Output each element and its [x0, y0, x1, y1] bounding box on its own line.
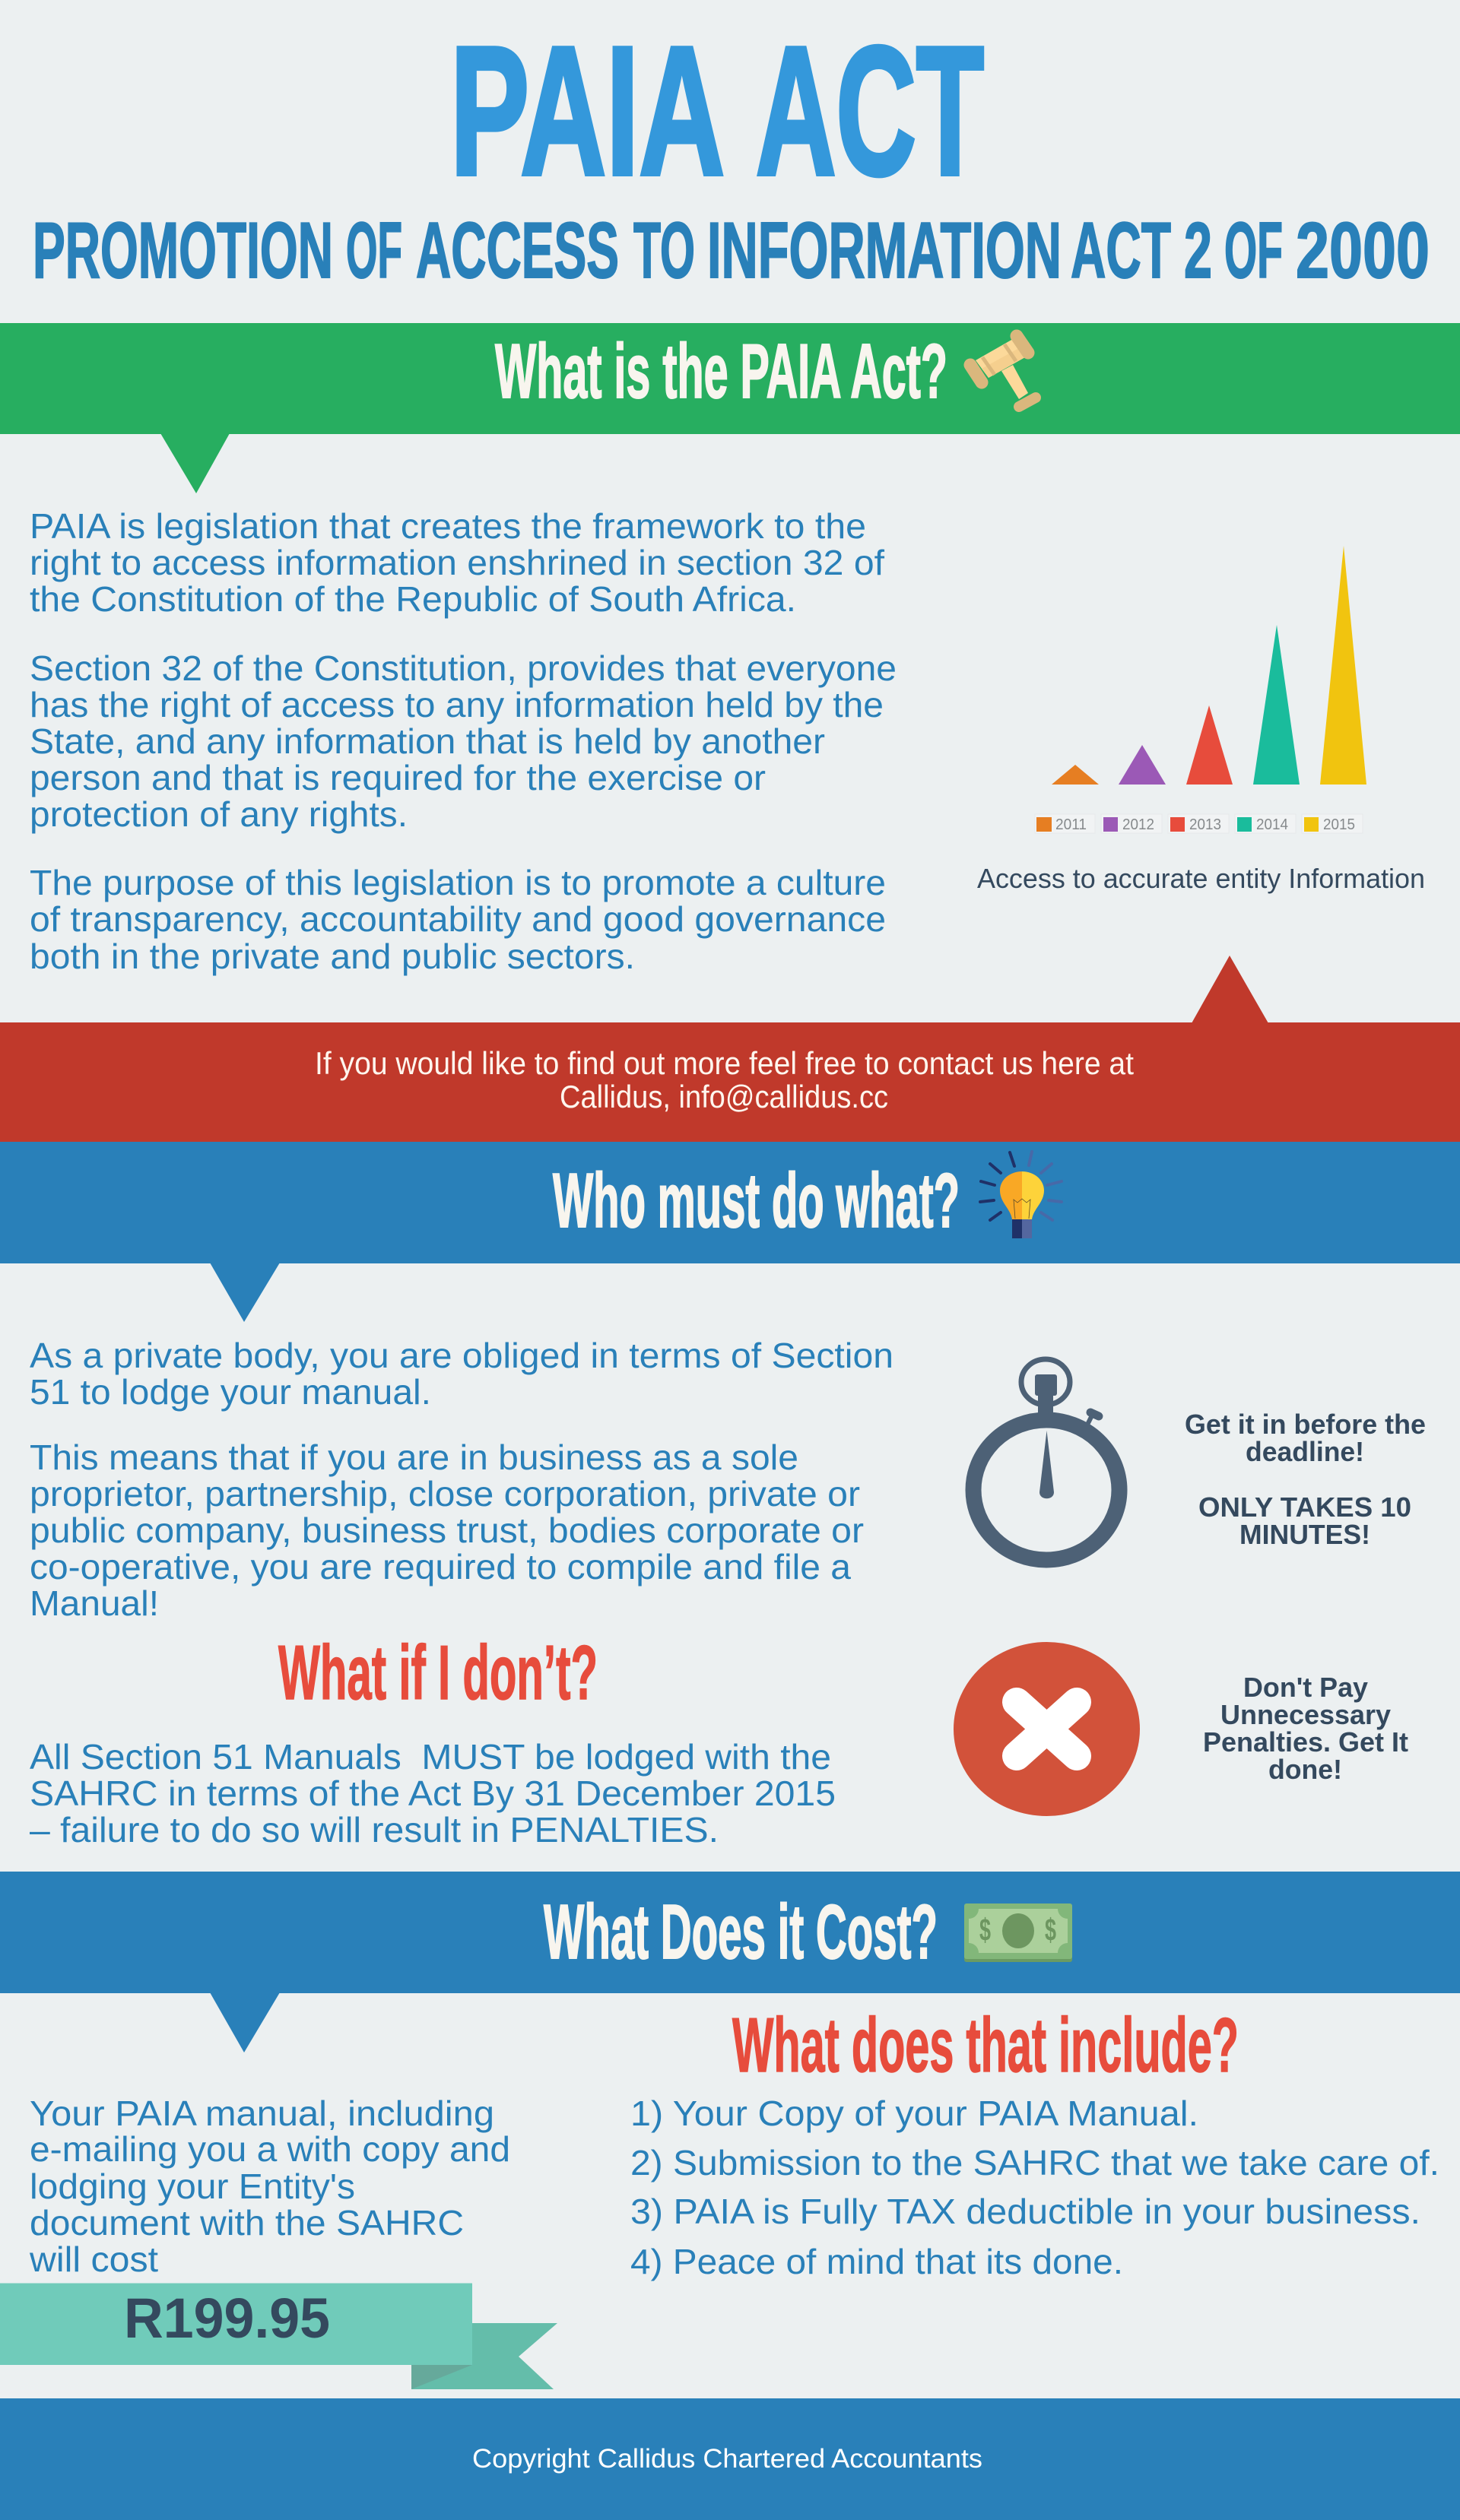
- text block: PAIA definition: [30, 506, 897, 976]
- icon: gavel: [970, 336, 1036, 407]
- subtitle: ACCESS: [416, 207, 619, 295]
- legend: 2012: [1122, 816, 1154, 833]
- text block: cost description: document with the SAHRC: [30, 2203, 464, 2243]
- text block: PAIA definition: has the right of access to any information held by the: [30, 685, 884, 724]
- list: what is included: [630, 2094, 1439, 2281]
- list: what is included: 4) Peace of mind that its done.: [630, 2242, 1123, 2281]
- legend: [1035, 814, 1363, 833]
- heading: what is the PAIA Act: What is the PAIA Act?: [495, 329, 947, 414]
- text block: private body obligations: proprietor, partnership, close corporation, private or: [30, 1474, 860, 1514]
- subtitle: 2: [1184, 207, 1212, 295]
- icon: stopwatch: [973, 1359, 1119, 1560]
- legend: 2015: [1323, 816, 1355, 833]
- price ribbon: [0, 2284, 557, 2389]
- text block: private body obligations: public company, business trust, bodies corporate or: [30, 1510, 864, 1550]
- copyright text: Copyright Callidus Chartered Accountants: [472, 2444, 982, 2474]
- legend: 2013: [1189, 816, 1221, 833]
- icon: red cross: [954, 1642, 1140, 1816]
- text block: penalties: All Section 51 Manuals MUST be lodged with the: [30, 1737, 831, 1777]
- text block: private body obligations: As a private body, you are obliged in terms of Section: [30, 1336, 893, 1375]
- panel: what does it cost banner: [0, 1872, 1460, 2052]
- callout: penalties: done!: [1268, 1754, 1342, 1785]
- text block: private body obligations: [30, 1336, 893, 1623]
- icon: bank note: $: [979, 1912, 991, 1948]
- chart: triangle bars: [1035, 546, 1366, 833]
- callout: deadline: MINUTES!: [1239, 1519, 1370, 1550]
- subtitle: OF: [1224, 207, 1283, 295]
- subtitle: INFORMATION: [707, 207, 1062, 295]
- heading: what does it cost: What Does it Cost?: [544, 1890, 938, 1975]
- contact text: [315, 1045, 1134, 1114]
- text block: PAIA definition: person and that is required for the exercise or: [30, 758, 766, 797]
- icon: light bulb: [980, 1152, 1062, 1238]
- callout: penalties: [1203, 1672, 1408, 1785]
- callout: penalties: Unnecessary: [1220, 1699, 1391, 1730]
- text block: PAIA definition: of transparency, accountability and good governance: [30, 899, 886, 939]
- text block: PAIA definition: Section 32 of the Constitution, provides that everyone: [30, 648, 897, 688]
- text block: penalties: [30, 1737, 836, 1850]
- footer: [0, 2398, 1460, 2520]
- text block: PAIA definition: PAIA is legislation that creates the framework to the: [30, 506, 866, 546]
- callout: penalties: Penalties. Get It: [1203, 1726, 1408, 1758]
- text block: PAIA definition: The purpose of this legislation is to promote a culture: [30, 863, 886, 902]
- text block: cost description: lodging your Entity's: [30, 2167, 355, 2206]
- panel: who must do what banner: [0, 1142, 1460, 1322]
- legend: 2011: [1055, 816, 1087, 833]
- text block: cost description: will cost: [29, 2239, 158, 2279]
- callout: deadline: Get it in before the: [1185, 1409, 1426, 1440]
- text block: private body obligations: Manual!: [30, 1583, 159, 1623]
- title: PAIA: [450, 9, 725, 214]
- price: R199.95: [124, 2287, 330, 2350]
- subtitle: PROMOTION: [33, 207, 333, 295]
- text block: PAIA definition: the Constitution of the Republic of South Africa.: [30, 579, 796, 619]
- text block: private body obligations: 51 to lodge your manual.: [30, 1372, 431, 1412]
- text block: PAIA definition: protection of any rights.: [30, 794, 408, 834]
- list: what is included: 1) Your Copy of your PAIA Manual.: [630, 2094, 1198, 2133]
- text block: PAIA definition: both in the private and public sectors.: [30, 937, 635, 976]
- contact text: Callidus, info@callidus.cc: [560, 1079, 888, 1114]
- subtitle: OF: [346, 207, 402, 295]
- legend: 2014: [1256, 816, 1288, 833]
- text block: PAIA definition: right to access information enshrined in section 32 of: [30, 543, 884, 582]
- subtitle: [33, 207, 1430, 295]
- icon: bank note: $: [1045, 1912, 1056, 1948]
- list: what is included: 2) Submission to the SAHRC that we take care of.: [630, 2143, 1439, 2182]
- list: what is included: 3) PAIA is Fully TAX deductible in your business.: [630, 2192, 1420, 2231]
- text block: PAIA definition: State, and any information that is held by another: [30, 721, 825, 761]
- panel: contact banner: [0, 956, 1460, 1142]
- subtitle: ACT: [1071, 207, 1171, 295]
- callout: deadline: [1185, 1409, 1426, 1550]
- subtitle: TO: [633, 207, 695, 295]
- title: ACT: [756, 9, 984, 214]
- text block: cost description: e-mailing you a with copy and: [30, 2129, 510, 2169]
- text block: cost description: Your PAIA manual, including: [30, 2094, 494, 2133]
- icon: bank note: [964, 1903, 1072, 1962]
- panel: what is the PAIA Act banner: [0, 323, 1460, 493]
- callout: deadline: deadline!: [1246, 1436, 1364, 1467]
- chart caption: Access to accurate entity Information: [977, 863, 1425, 894]
- contact text: If you would like to find out more feel free to contact us here at: [315, 1045, 1134, 1081]
- heading: who must do what: Who must do what?: [553, 1159, 960, 1244]
- text block: private body obligations: This means that if you are in business as a sole: [30, 1438, 798, 1477]
- text block: penalties: SAHRC in terms of the Act By 31 December 2015: [30, 1774, 836, 1813]
- text block: cost description: [29, 2094, 510, 2279]
- callout: penalties: Don't Pay: [1243, 1672, 1368, 1703]
- callout: deadline: ONLY TAKES 10: [1198, 1491, 1411, 1523]
- text block: private body obligations: co-operative, you are required to compile and file a: [30, 1547, 851, 1586]
- text block: penalties: – failure to do so will result in PENALTIES.: [30, 1810, 719, 1850]
- heading: what if I don't: What if I don’t?: [278, 1631, 598, 1716]
